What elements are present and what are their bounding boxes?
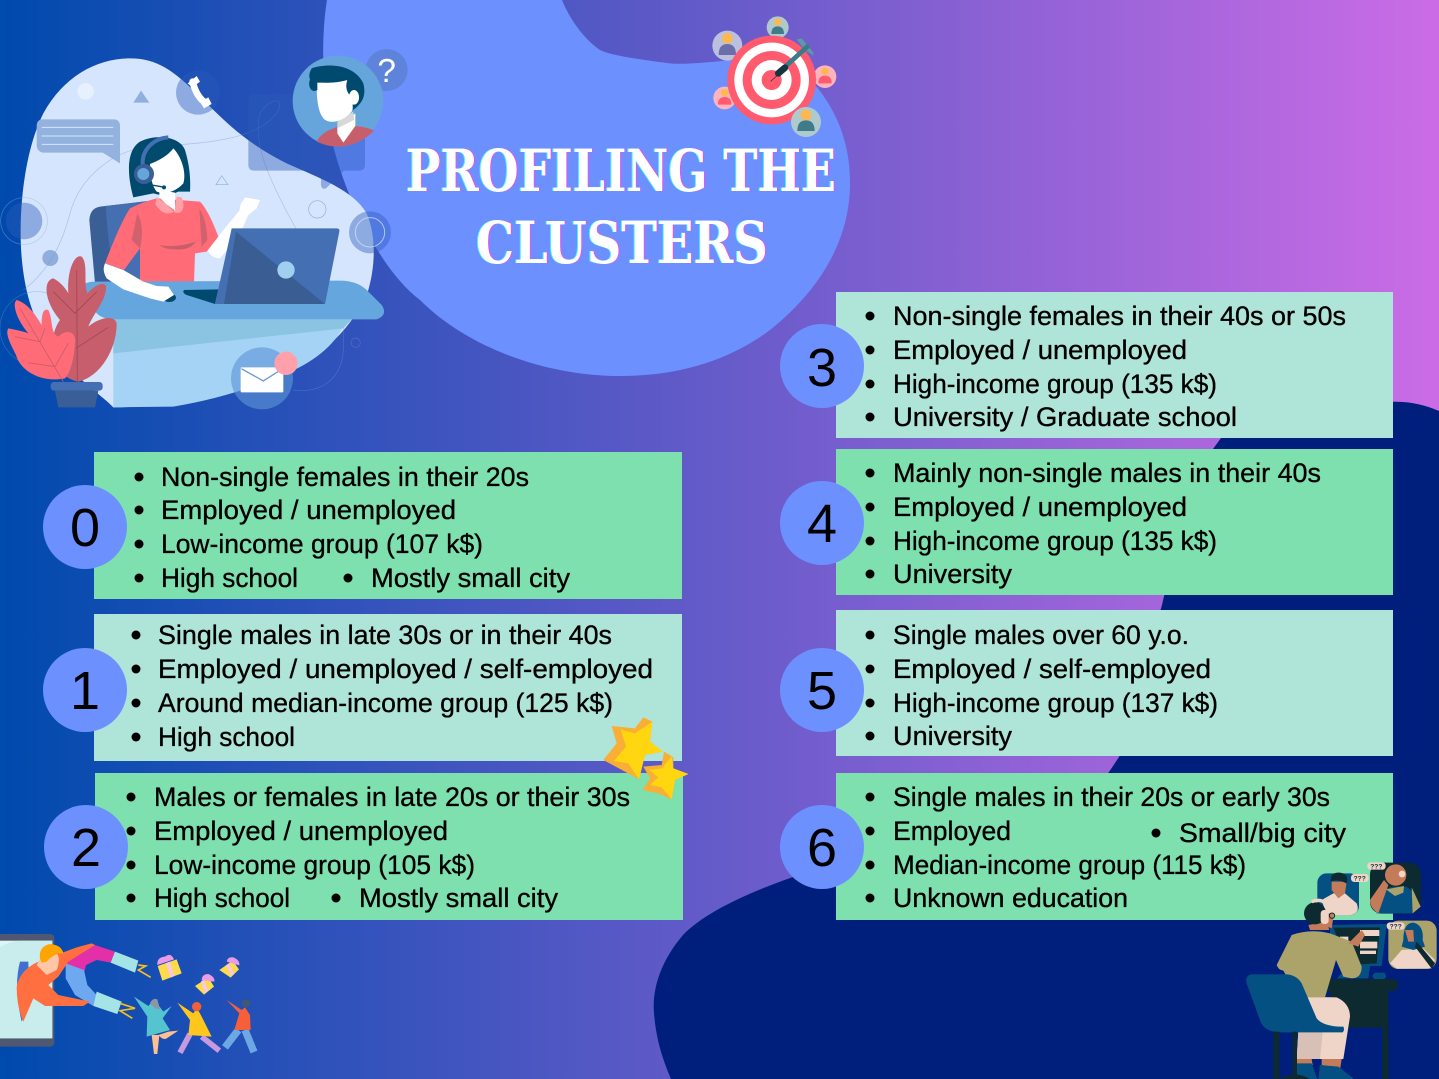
neck [159, 190, 175, 211]
cluster 4 text: Mainly non-single males in their 40s [893, 458, 1321, 488]
cluster 0 text: Employed / unemployed [161, 495, 456, 525]
cluster 6 text: Small/big city [1179, 818, 1347, 848]
customer avatar [293, 56, 383, 147]
bullets [866, 312, 874, 422]
cluster 4 text: University [893, 559, 1012, 589]
face [150, 148, 184, 193]
cluster 1 text [158, 620, 653, 752]
cluster 3 text: Non-single females in their 40s or 50s [893, 301, 1346, 331]
number badge 6 [780, 805, 864, 889]
illustration: call centre agent [0, 49, 408, 409]
chair [1246, 974, 1344, 1079]
cluster 5 text: Employed / self-employed [893, 654, 1211, 684]
number badge 3 [780, 324, 864, 408]
video tile: man with headset: ??? [1354, 875, 1366, 882]
cluster 3 text: High-income group (135 k$) [893, 369, 1217, 399]
head and headset [1308, 922, 1329, 930]
panel: cluster 3 [836, 292, 1393, 438]
panel: cluster 0 [94, 452, 682, 599]
worker seated [1277, 900, 1365, 1079]
cluster 6 text: Single males in their 20s or early 30s [893, 782, 1330, 812]
desk [83, 281, 384, 407]
panel: cluster 1 [94, 614, 682, 761]
navy background blob [654, 402, 1439, 1079]
panel: cluster 4 [836, 449, 1393, 595]
cluster 4 text: Employed / unemployed [893, 492, 1187, 522]
customer in teal dress [134, 997, 178, 1054]
dress [105, 198, 218, 283]
cluster 5 text: University [893, 721, 1012, 751]
video tile: older man on phone: ??? [1370, 863, 1382, 870]
number badge 1 [43, 648, 127, 732]
cluster 4 text [893, 458, 1321, 589]
laptop [215, 228, 339, 304]
hair [129, 137, 190, 197]
customer in yellow coat [177, 1002, 219, 1053]
number badge 5: 5 [807, 661, 837, 721]
video tile: man with headset [1317, 873, 1369, 915]
icon: phone [176, 71, 220, 115]
icon: two gold stars [603, 717, 688, 799]
legs [1297, 997, 1350, 1059]
agent figure [105, 137, 260, 283]
cluster 1 text: Single males in late 30s or in their 40s [158, 620, 612, 650]
panel: cluster 5 [836, 610, 1393, 756]
number badge 6: 6 [807, 818, 837, 878]
bullets [866, 630, 874, 740]
question mark badge: ? [377, 53, 396, 90]
raised arm [207, 197, 260, 258]
lower right person badge [791, 107, 821, 137]
bullets [134, 472, 352, 582]
icon: target with dart and people [712, 16, 836, 137]
large speech square [248, 94, 365, 189]
desk [1323, 979, 1398, 1079]
number badge 3: 3 [807, 338, 837, 398]
cluster 4 text: High-income group (135 k$) [893, 526, 1217, 556]
right rings [349, 211, 391, 253]
title [406, 137, 836, 277]
cluster 3 text: Employed / unemployed [893, 335, 1187, 365]
cluster 0 text [161, 462, 571, 593]
cluster 0 text: High school [161, 563, 298, 593]
forearm and hand [1348, 930, 1365, 947]
cluster 2 text: Mostly small city [359, 883, 559, 913]
cluster 2 text: Employed / unemployed [154, 816, 448, 846]
gift boxes [157, 955, 239, 995]
person badges [712, 16, 836, 109]
cluster 3 text [893, 301, 1346, 432]
illustration: remote support worker [1246, 862, 1437, 1079]
bullets [126, 792, 340, 902]
cluster 1 text: Around median-income group (125 k$) [158, 688, 613, 718]
cluster 6 text: Employed [893, 816, 1011, 846]
lower arm and mouse [104, 263, 176, 302]
torso [1277, 931, 1362, 997]
phone [0, 934, 54, 1047]
number badge 0: 0 [70, 498, 100, 558]
lightning sparks [120, 965, 151, 1018]
cluster 6 text [893, 782, 1347, 913]
customer in orange top [225, 999, 254, 1052]
bullets [866, 468, 874, 578]
bullets [132, 630, 140, 742]
number badge 4 [780, 481, 864, 565]
panel: cluster 2 [95, 773, 683, 920]
number badge 5 [780, 648, 864, 732]
person reaching out of phone [17, 943, 95, 1022]
cluster 1 text: High school [158, 722, 295, 752]
triangle and dot decorations [42, 83, 326, 266]
number badge 0 [43, 485, 127, 569]
left rings [1, 198, 47, 244]
cluster 5 text: High-income group (137 k$) [893, 688, 1218, 718]
cluster 2 text [154, 782, 630, 913]
collar [155, 197, 183, 214]
periwinkle title blob [323, 0, 850, 376]
video tile: older man on phone [1367, 862, 1421, 914]
cluster 2 text: Males or females in late 20s or their 30s [154, 782, 630, 812]
cluster 5 text: Single males over 60 y.o. [893, 620, 1189, 650]
icon: envelope [231, 347, 298, 409]
cluster 1 text: Employed / unemployed / self-employed [158, 654, 653, 684]
number badge 2 [44, 805, 128, 889]
cluster 2 text: Low-income group (105 k$) [154, 850, 475, 880]
bullets [866, 792, 1160, 902]
cluster 3 text: University / Graduate school [893, 402, 1237, 432]
cluster 6 text: Median-income group (115 k$) [893, 850, 1246, 880]
cluster 5 text [893, 620, 1218, 751]
icon: chat bubble [37, 119, 120, 163]
cluster 2 text: High school [154, 883, 290, 913]
video tile: woman in hijab [1387, 921, 1437, 969]
panel: cluster 6 [836, 773, 1393, 920]
cluster 0 text: Non-single females in their 20s [161, 462, 529, 492]
target rings [727, 36, 816, 124]
number badge 2: 2 [71, 818, 101, 878]
pale background shape [21, 58, 374, 407]
headset [143, 137, 168, 165]
dart [771, 38, 813, 81]
cluster 0 text: Low-income group (107 k$) [161, 529, 483, 559]
plant [7, 256, 117, 407]
number badge 1: 1 [70, 661, 100, 721]
magnet [66, 944, 138, 1014]
title line 1: PROFILING THE [406, 137, 836, 205]
illustration: magnet attracting customers [0, 934, 254, 1054]
number badge 4: 4 [807, 494, 837, 554]
cluster 6 text: Unknown education [893, 883, 1128, 913]
video tile: woman in hijab: ??? [1390, 923, 1402, 930]
chair [89, 200, 157, 283]
monitor [1330, 924, 1387, 979]
decorative thin curves [0, 101, 360, 390]
question mark badge [366, 49, 408, 91]
cluster 0 text: Mostly small city [371, 563, 571, 593]
title line 2: CLUSTERS [476, 209, 768, 277]
